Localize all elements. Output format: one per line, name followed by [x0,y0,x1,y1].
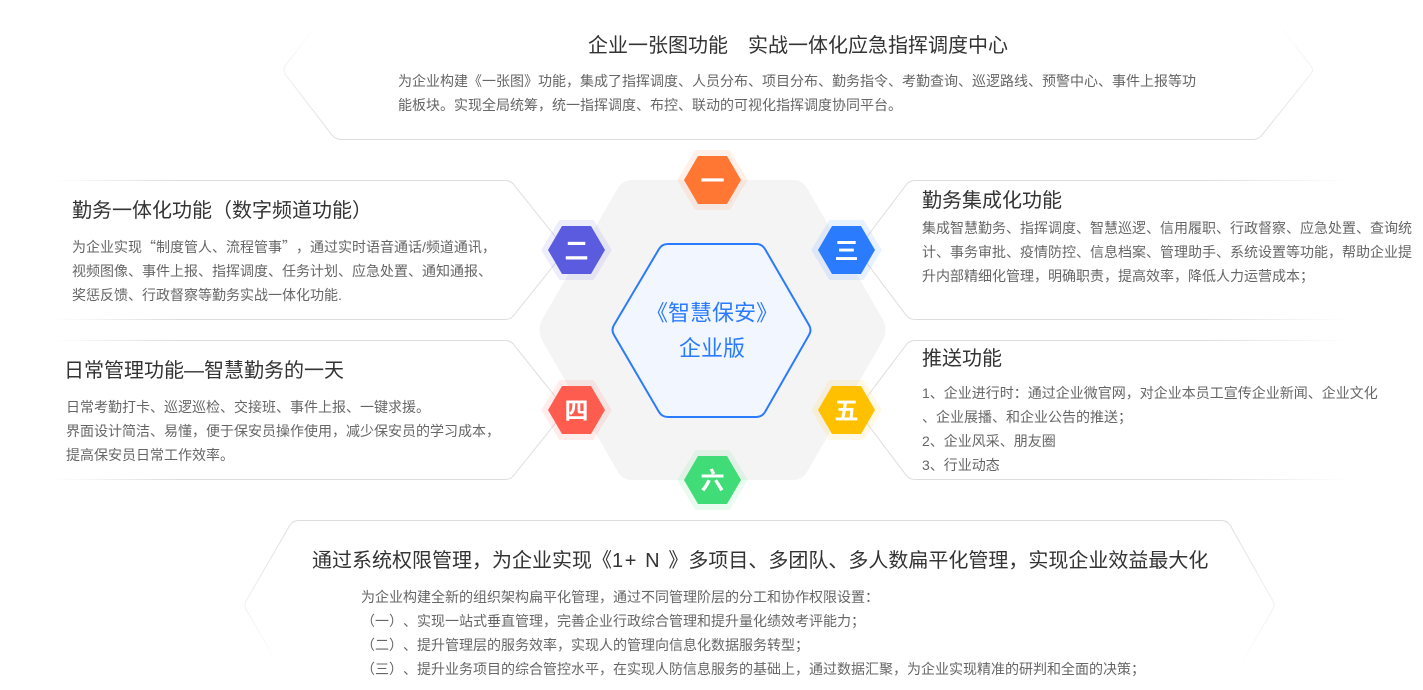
text: integrated duty description: 为企业实现“制度管人、流程管事”，通过实时语音通话/频道通讯， 视频图像、事件上报、指挥调度、任务计划、应急处置、通知通报、 奖惩反馈、行政督察等勤务实战一体化功能. [72,237,496,303]
icon: hexagon one: 一 [700,161,724,196]
panel: push function [867,340,1378,480]
icon: hexagon three: 三 [834,231,858,266]
text: duty integration description: 集成智慧勤务、指挥调度、智慧巡逻、信用履职、行政督察、应急处置、查询统 计、事务审批、疫情防控、信息档案、管理助手、系统设置等功能，帮助企业提 升内部精细化管理，明确职责，提高效率，降低人力运营成本； [922,220,1412,284]
center title [646,300,778,361]
panel: permission management [244,520,1274,677]
heading: permission management: 通过系统权限管理，为企业实现《1+ N 》多项目、多团队、多人数扁平化管理，实现企业效益最大化 [312,550,1208,572]
panel: daily management [64,340,556,480]
center hexagon [612,244,810,417]
icon: hexagon four [544,382,610,438]
text: daily management description: 日常考勤打卡、巡逻巡检、交接班、事件上报、一键求援。 界面设计简洁、易懂，便于保安员操作使用，减少保安员的学习成本， 提高保安员日常工作效率。 [66,399,500,463]
heading: integrated duty: 勤务一体化功能（数字频道功能） [72,200,372,222]
panel: enterprise one map [284,34,1313,140]
heading: enterprise one map: 企业一张图功能 实战一体化应急指挥调度中心 [588,35,1008,57]
heading: duty integration: 勤务集成化功能 [922,190,1062,212]
icon: hexagon three [814,222,880,278]
icon: hexagon five: 五 [834,391,858,426]
heading: daily management: 日常管理功能—智慧勤务的一天 [64,360,344,382]
icon: hexagon one [680,152,746,208]
text: permission management description: 为企业构建全新的组织架构扁平化管理，通过不同管理阶层的分工和协作权限设置： （一）、实现一站式垂直管理，完善企业行政综合管理和提升量化绩效考评能力； （二）、提升管理层的服务效率，实现人的管理向信息化数据服务转型； （三）、提升业务项目的综合管控水平，在实现人防信息服务的基础上，通过数据汇聚，为企业实现精准的研判和全面的决策； [361,589,1145,677]
center title: 《智慧保安》 [646,300,778,326]
panel: duty integration [867,180,1412,320]
icon: hexagon five [814,382,880,438]
text: push function description: 1、企业进行时：通过企业微官网，对企业本员工宣传企业新闻、企业文化 、企业展播、和企业公告的推送； 2、企业风采、朋友圈 3、行业动态 [922,385,1378,473]
heading: push function: 推送功能 [922,348,1002,370]
background hexagon [540,180,886,480]
icon: hexagon two [544,222,610,278]
icon: hexagon four: 四 [564,391,588,426]
center title: 企业版 [679,336,745,361]
icon: hexagon six [680,452,746,508]
icon: hexagon six: 六 [700,461,724,496]
text: enterprise one map description: 为企业构建《一张图》功能，集成了指挥调度、人员分布、项目分布、勤务指令、考勤查询、巡逻路线、预警中心、事件上报等功 能板块。实现全局统筹，统一指挥调度、布控、联动的可视化指挥调度协同平台。 [398,73,1196,113]
panel: integrated duty [72,180,556,320]
central diagram [540,150,886,510]
icon: hexagon two: 二 [564,231,588,266]
